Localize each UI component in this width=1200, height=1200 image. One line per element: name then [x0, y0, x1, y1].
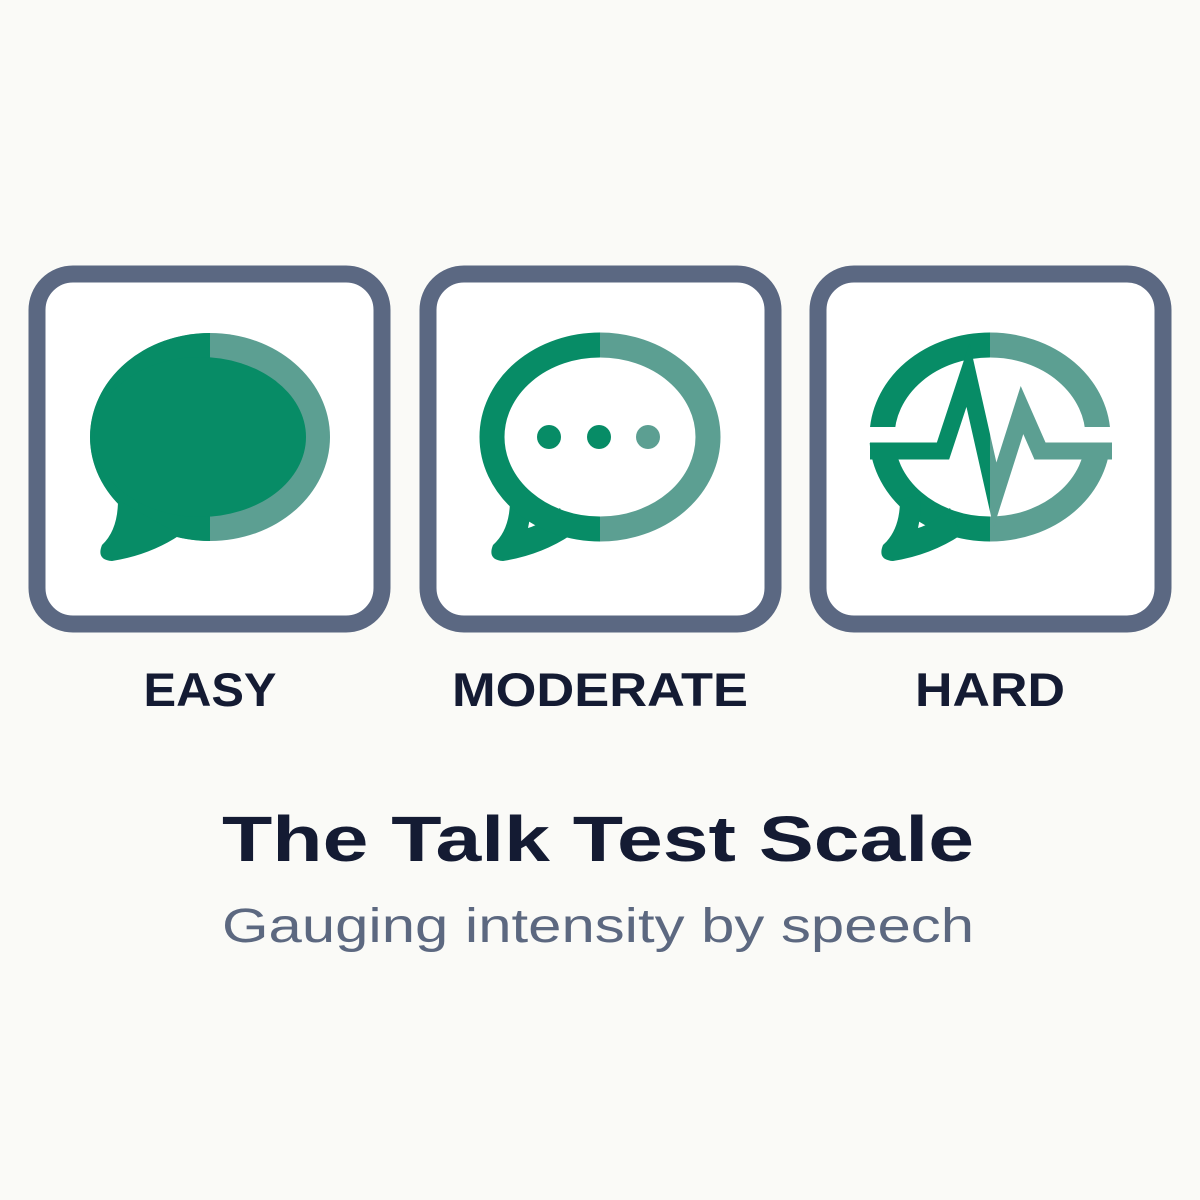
subtitle: Gauging intensity by speech — [222, 900, 974, 953]
icon: solid speech bubble — [90, 333, 330, 561]
label: moderate: MODERATE — [452, 663, 748, 716]
panel: moderate — [428, 274, 773, 624]
panel: easy — [37, 274, 382, 624]
label: hard: HARD — [915, 663, 1065, 716]
icon: speech bubble with dots — [491, 345, 708, 561]
icon: speech bubble with pulse line — [870, 345, 1112, 561]
panel: hard — [818, 274, 1163, 624]
label: easy: EASY — [144, 663, 276, 716]
title: The Talk Test Scale — [222, 803, 974, 875]
